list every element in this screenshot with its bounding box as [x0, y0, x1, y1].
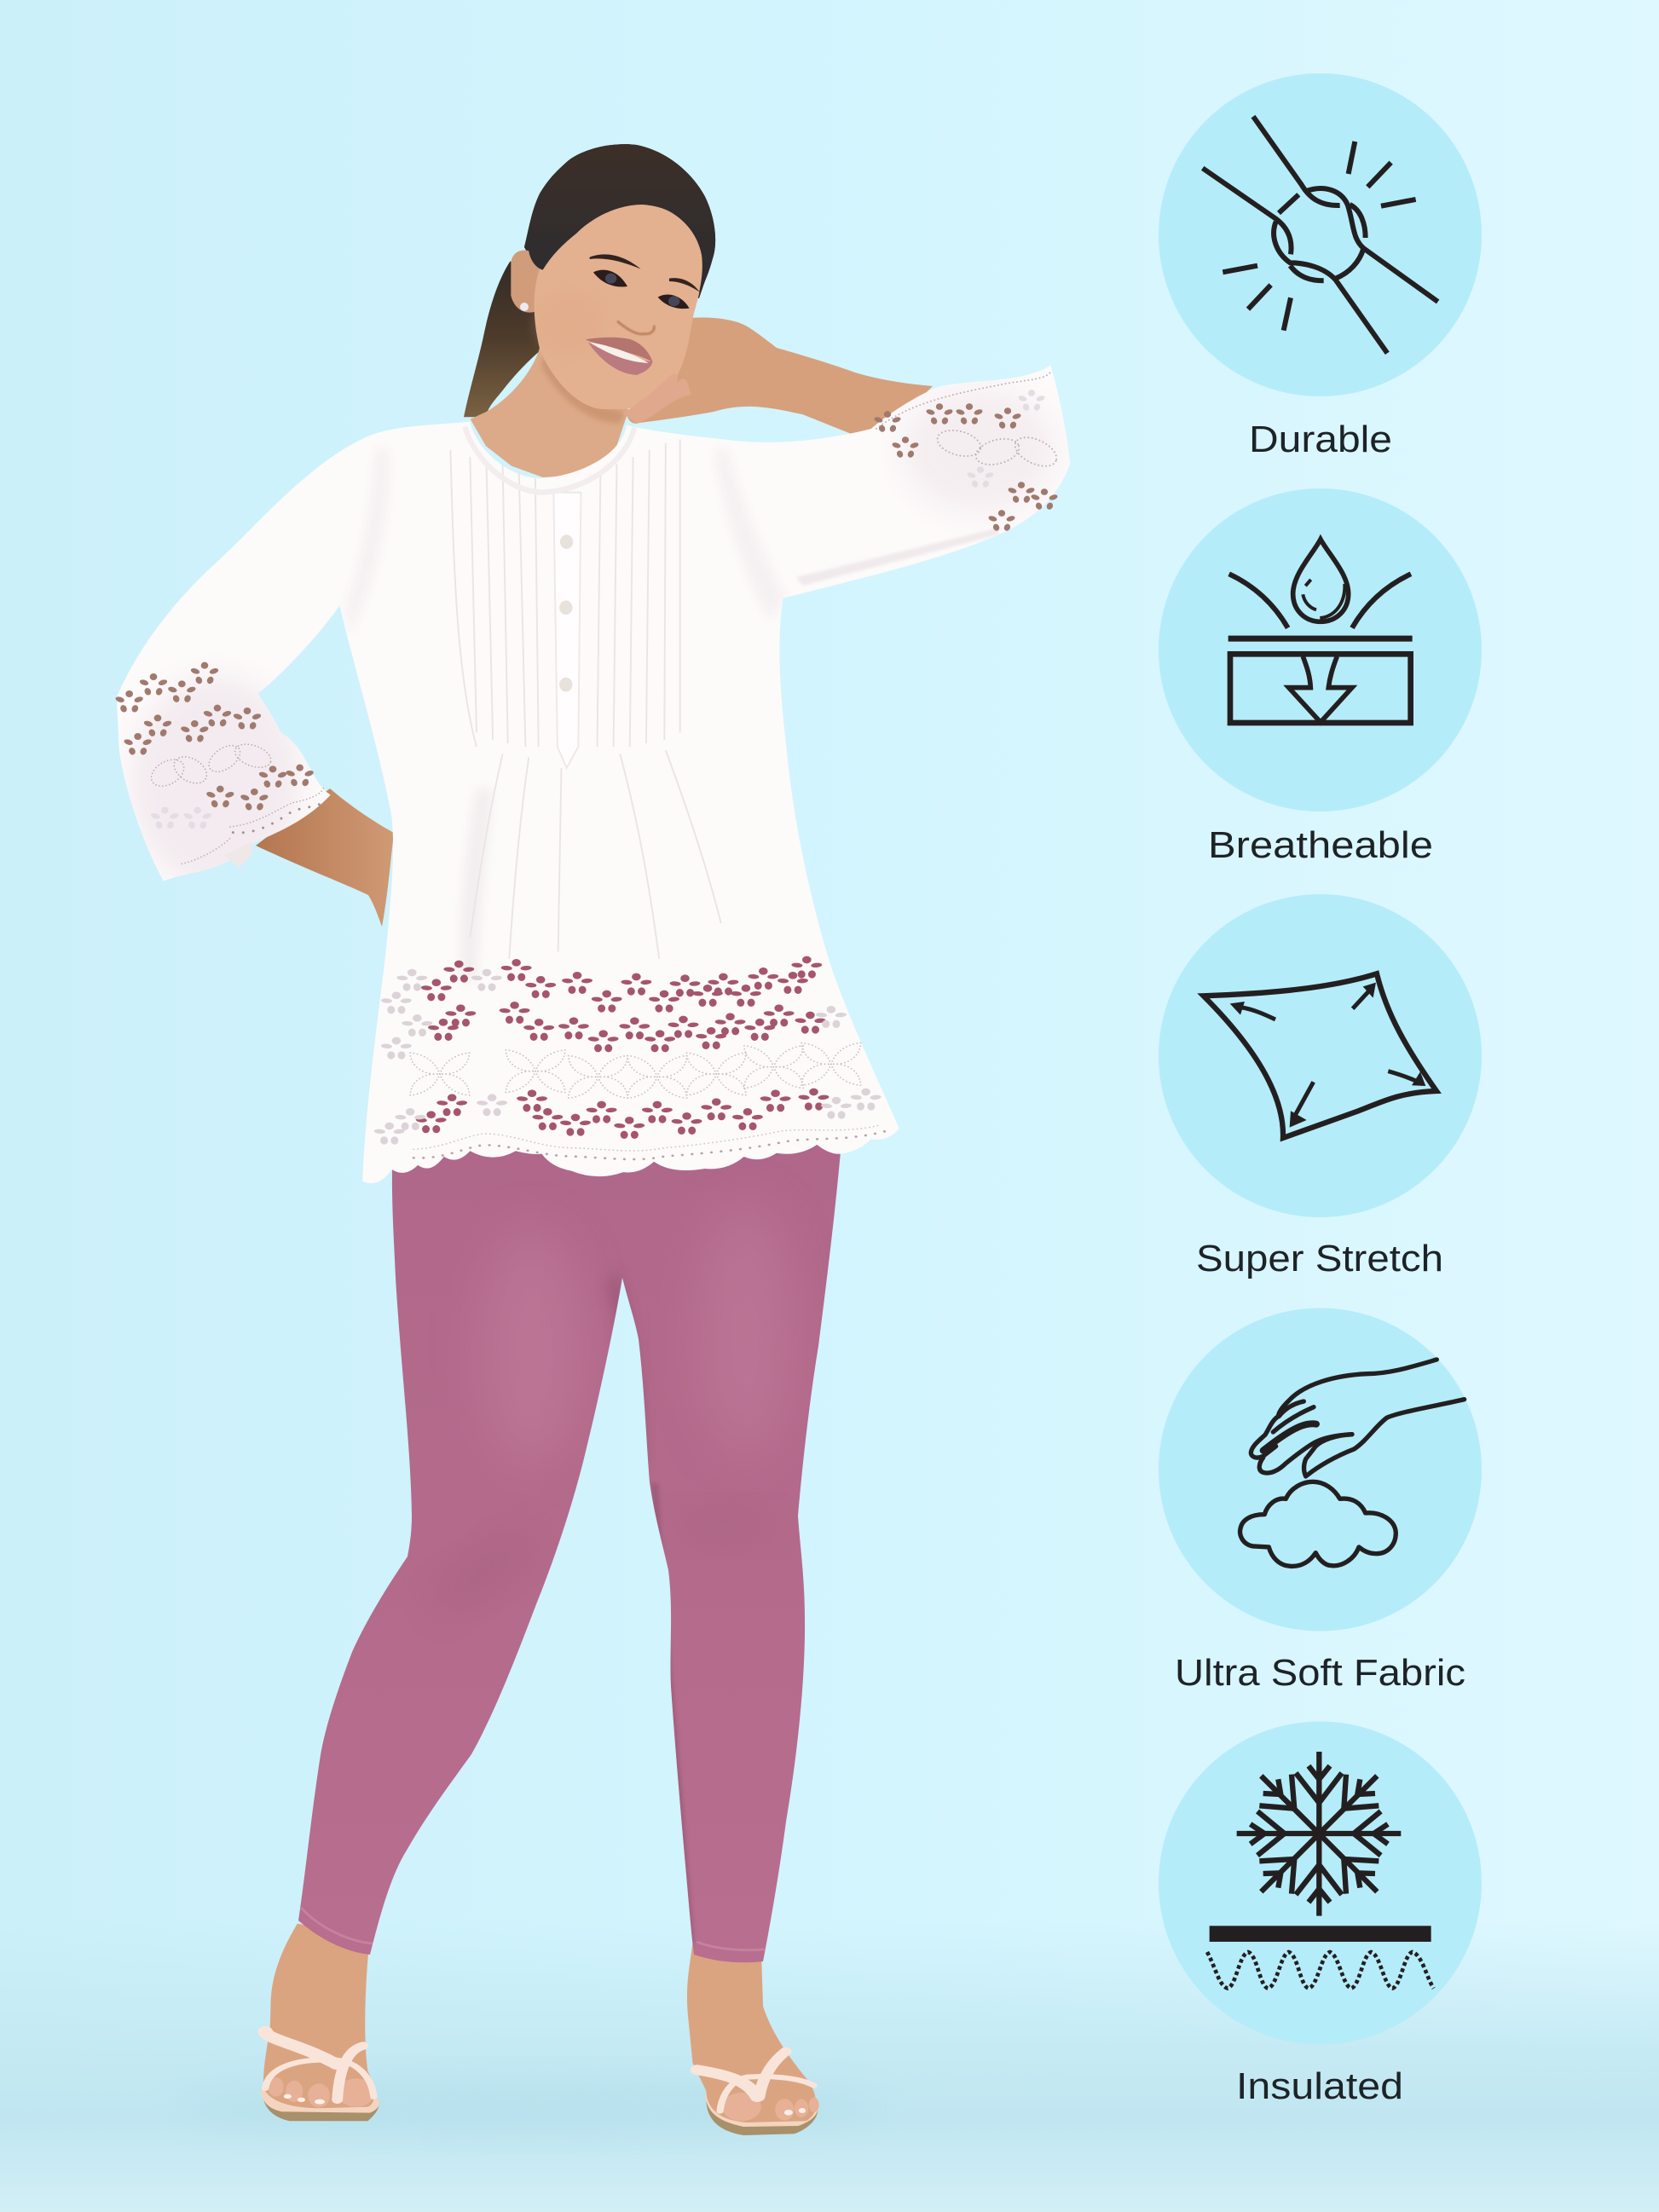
edge dots [413, 1125, 887, 1159]
hair underlay [524, 144, 715, 298]
stretch arrows [1230, 983, 1425, 1128]
icon: water drop on membrane [1228, 540, 1413, 723]
icon: snowflake over barrier and heat wave [1207, 1752, 1434, 1989]
left cuff eyelets [115, 662, 326, 868]
right foot and sandal [687, 1943, 819, 2135]
label: Super Stretch [1196, 1238, 1443, 1279]
face [535, 203, 702, 409]
circle [1159, 1308, 1482, 1632]
hair [524, 144, 715, 292]
leggings [290, 1134, 853, 1969]
circle [1159, 73, 1482, 396]
icon: hand touching cloud [1240, 1360, 1465, 1566]
arm behind waist [256, 788, 394, 927]
dotted lens motifs [410, 1042, 861, 1098]
dotted heat wave [1207, 1952, 1434, 1989]
feature: insulated [1159, 1722, 1482, 2107]
snowflake [1237, 1752, 1401, 1916]
ponytail [464, 262, 541, 417]
brows and eyes [590, 254, 700, 309]
model photo figure [115, 144, 1070, 2135]
circle [1159, 488, 1482, 811]
fingers [622, 374, 691, 424]
button placket [553, 493, 581, 768]
label: Insulated [1236, 2065, 1403, 2107]
white blouse [117, 365, 1070, 1183]
circle [1159, 894, 1482, 1217]
toes [268, 2077, 375, 2107]
left foot and sandal [260, 1924, 379, 2121]
nose [617, 321, 654, 334]
flower rows [415, 956, 830, 1139]
pintucks [450, 439, 721, 959]
neck [471, 347, 628, 477]
feature: ultra soft fabric [1159, 1308, 1482, 1694]
pale flowers [373, 969, 882, 1145]
raised arm and hand [627, 318, 933, 443]
right cuff eyelets [874, 373, 1061, 532]
label: Durable [1249, 419, 1392, 460]
feature: breatheable [1159, 488, 1482, 866]
label: Breatheable [1208, 824, 1433, 866]
feature: durable [1159, 73, 1482, 460]
hem eyelet lace [373, 956, 887, 1159]
blouse shading [131, 386, 1057, 980]
mouth [586, 338, 653, 375]
collar [465, 427, 634, 493]
icon: stretched fabric [1204, 973, 1436, 1138]
circle [1159, 1722, 1482, 2044]
label: Ultra Soft Fabric [1175, 1652, 1465, 1694]
feature: super stretch [1159, 894, 1482, 1279]
ear and earring [511, 251, 541, 313]
icon: knotted threads [1203, 117, 1438, 353]
toes [722, 2093, 819, 2121]
head [511, 144, 715, 424]
